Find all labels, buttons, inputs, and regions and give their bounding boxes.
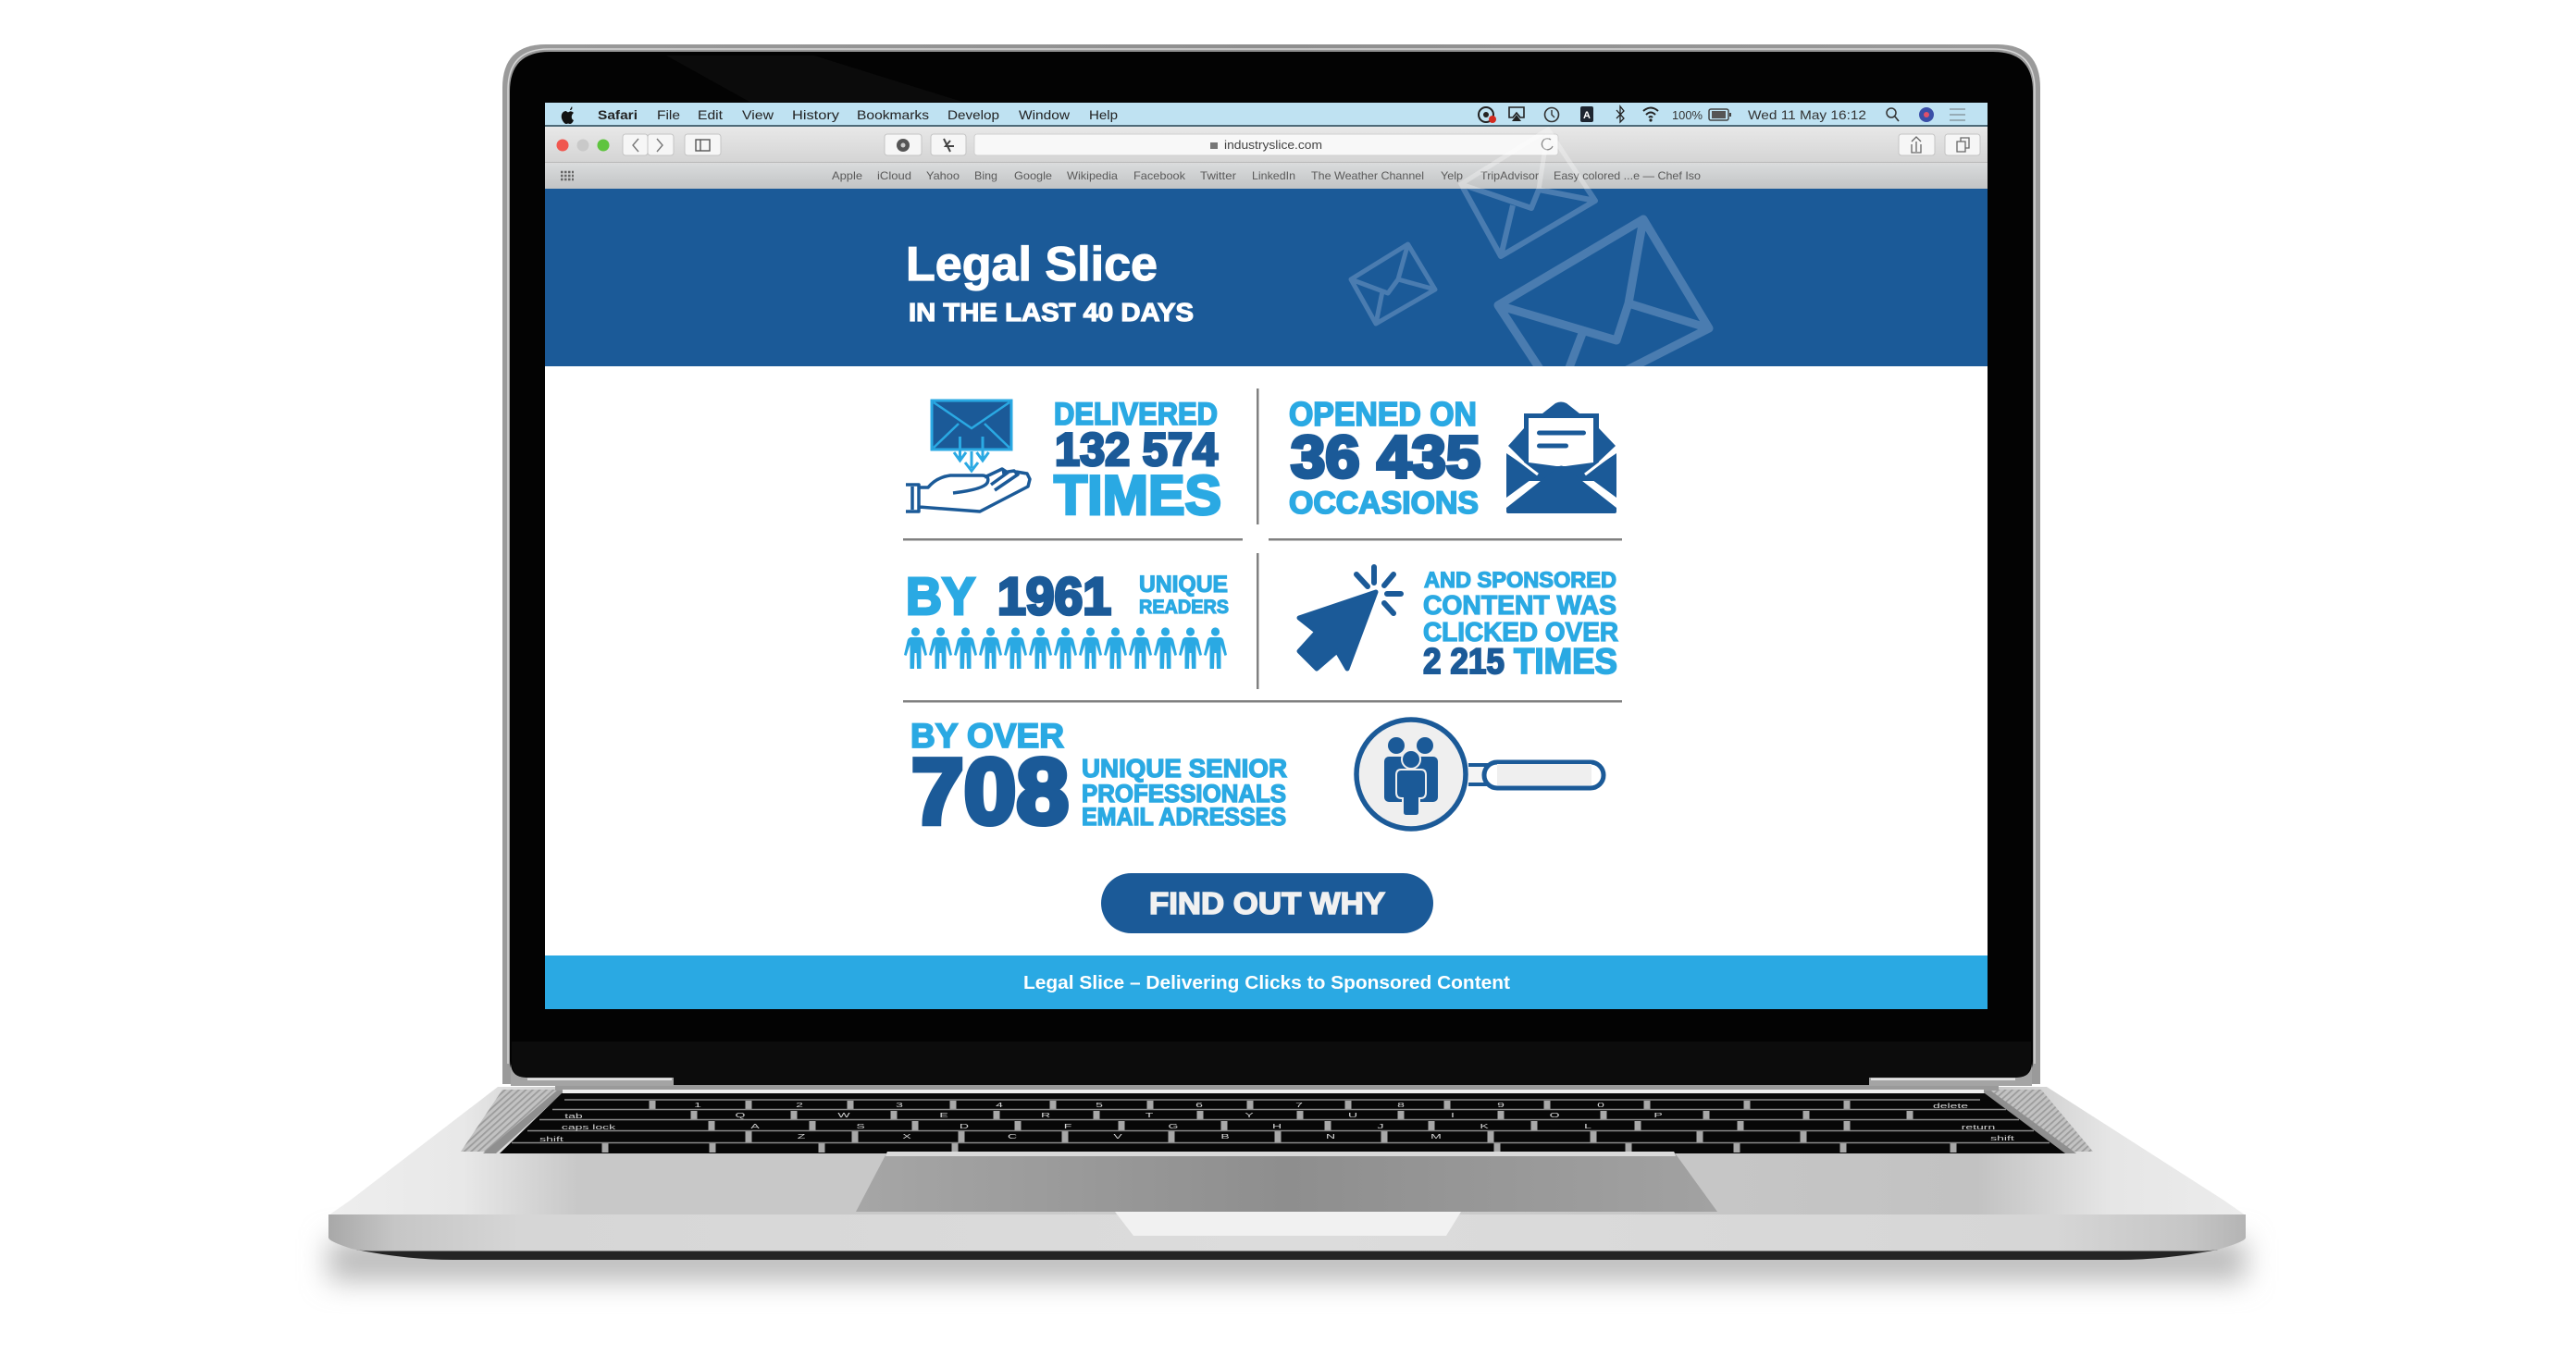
key labels: W — [837, 1112, 850, 1119]
icon: envelope over hand — [906, 401, 1030, 512]
key labels: G — [1169, 1123, 1178, 1130]
key labels: B — [1220, 1133, 1230, 1140]
bookmark links: Bing — [974, 169, 997, 182]
professionals text: EMAIL ADRESSES — [1082, 803, 1286, 831]
trackpad — [856, 1152, 1717, 1212]
menu items: History — [792, 107, 839, 122]
hinge strip — [555, 1084, 1999, 1091]
professionals text: PROFESSIONALS — [1082, 780, 1286, 807]
bookmark links: LinkedIn — [1252, 169, 1295, 182]
icon: top sites grid — [561, 172, 574, 179]
key labels: A — [750, 1123, 760, 1130]
panel: readers — [904, 567, 1229, 669]
faint envelope over toolbar — [1458, 133, 1590, 189]
keyboard channel — [483, 1090, 2076, 1153]
header title: Legal Slice — [906, 238, 1158, 291]
key labels: D — [960, 1123, 969, 1130]
address bar — [974, 134, 1558, 155]
key labels: 6 — [1195, 1102, 1203, 1109]
professionals text — [1082, 754, 1287, 831]
front underside — [356, 1250, 2218, 1260]
bookmark links — [832, 169, 1701, 182]
key labels: L — [1584, 1123, 1591, 1130]
delivered number: 132 574 — [1055, 424, 1218, 475]
key labels: R — [1041, 1112, 1050, 1119]
key labels: F — [1064, 1123, 1072, 1130]
key labels: C — [1008, 1133, 1017, 1140]
bookmark links: Wikipedia — [1067, 169, 1118, 182]
key labels: 8 — [1397, 1102, 1405, 1109]
key labels: shift — [539, 1136, 564, 1143]
key labels: 0 — [1597, 1102, 1604, 1109]
key labels: Z — [798, 1133, 806, 1140]
bookmark links: Apple — [832, 169, 862, 182]
readers number: 1961 — [997, 567, 1111, 626]
menu items: Bookmarks — [857, 107, 929, 122]
key labels: 1 — [694, 1102, 701, 1109]
by label: BY — [906, 567, 975, 626]
header banner — [545, 189, 1988, 366]
bookmark links: Twitter — [1200, 169, 1236, 182]
by over label: BY OVER — [910, 717, 1064, 755]
dividers — [903, 388, 1622, 703]
screen — [545, 103, 1988, 1009]
bookmark links: Yahoo — [926, 169, 960, 182]
key labels: 9 — [1497, 1102, 1505, 1109]
menu items: Safari — [598, 107, 638, 122]
status icons: A — [1583, 110, 1591, 121]
status icons — [1479, 106, 1965, 123]
footer bar — [545, 955, 1988, 1009]
bookmark links: TripAdvisor — [1480, 169, 1539, 182]
opening notch — [1115, 1212, 1461, 1236]
professionals text: UNIQUE SENIOR — [1082, 754, 1287, 783]
key labels: caps lock — [562, 1124, 616, 1131]
footer bar: Legal Slice – Delivering Clicks to Sponsored Content — [1023, 973, 1510, 993]
key labels: Q — [736, 1112, 746, 1119]
keyboard well — [500, 1093, 2065, 1153]
sponsored text: CLICKED OVER — [1423, 618, 1618, 647]
hinges — [511, 1064, 2032, 1086]
times label: TIMES — [1054, 464, 1221, 526]
sponsored text — [1423, 568, 1618, 682]
menu items — [598, 107, 1118, 122]
panel: senior professionals — [910, 717, 1604, 844]
speaker grilles — [461, 1090, 2093, 1152]
bookmark links: The Weather Channel — [1311, 169, 1424, 182]
key labels: 3 — [896, 1102, 903, 1109]
envelope watermarks — [1349, 189, 1714, 366]
key labels: H — [1272, 1123, 1282, 1130]
key labels: shift — [1990, 1135, 2014, 1142]
lid rim — [502, 44, 2040, 1084]
opened number: 36 435 — [1291, 424, 1480, 490]
icon: apple — [562, 106, 574, 124]
professionals number: 708 — [911, 740, 1069, 844]
key labels: Y — [1245, 1112, 1254, 1119]
browser toolbar — [545, 127, 1988, 163]
key labels: V — [1113, 1133, 1122, 1140]
menu items: Edit — [698, 107, 723, 122]
sponsored text: AND SPONSORED — [1424, 568, 1616, 593]
readers label: READERS — [1139, 597, 1229, 618]
button: find out why — [1101, 873, 1433, 933]
key labels: return — [1962, 1124, 1995, 1131]
key labels: N — [1326, 1133, 1335, 1140]
keyboard deck — [328, 1087, 2246, 1215]
bookmark links: Google — [1014, 169, 1052, 182]
people row — [904, 627, 1227, 669]
traffic lights — [557, 139, 609, 152]
key labels: T — [1146, 1112, 1154, 1119]
header subtitle: IN THE LAST 40 DAYS — [909, 298, 1194, 327]
toolbar buttons — [623, 134, 1980, 155]
key labels: I — [1451, 1112, 1455, 1119]
key labels: P — [1653, 1112, 1663, 1119]
address bar: industryslice.com — [1224, 138, 1322, 152]
menu items: File — [657, 107, 680, 122]
key labels: O — [1550, 1112, 1560, 1119]
key labels — [539, 1102, 2014, 1143]
bookmark links: iCloud — [877, 169, 911, 182]
laptop lid and bezel — [502, 44, 2040, 1086]
unique label: UNIQUE — [1139, 572, 1228, 598]
key labels: M — [1430, 1133, 1442, 1140]
key labels: X — [902, 1133, 911, 1140]
key labels: 4 — [996, 1102, 1003, 1109]
key labels: J — [1378, 1123, 1383, 1130]
key labels: delete — [1933, 1103, 1968, 1110]
black bezel — [510, 52, 2033, 1085]
key labels: S — [856, 1123, 865, 1130]
panel: sponsored clicks — [1299, 567, 1618, 682]
sponsored text: CONTENT WAS — [1423, 591, 1616, 621]
menu items: View — [742, 107, 774, 122]
key labels: K — [1480, 1123, 1489, 1130]
menu items: Help — [1089, 107, 1118, 122]
key labels: 7 — [1295, 1102, 1303, 1109]
panel: opened — [1289, 395, 1616, 521]
opened label: OPENED ON — [1289, 395, 1477, 433]
laptop base — [328, 1084, 2246, 1260]
bookmark links: Yelp — [1441, 169, 1463, 182]
panel: delivered — [906, 397, 1221, 526]
sponsored text: TIMES — [1514, 642, 1617, 682]
front edge — [328, 1214, 2246, 1251]
icon: magnifier with people — [1356, 720, 1604, 829]
delivered label: DELIVERED — [1054, 397, 1218, 432]
key labels: 5 — [1096, 1102, 1103, 1109]
status icons: 100% — [1672, 108, 1703, 122]
status icons: Wed 11 May 16:12 — [1748, 107, 1866, 122]
bookmark links: Easy colored ...e — Chef Iso — [1554, 169, 1701, 182]
menu items: Develop — [947, 107, 999, 122]
key labels: E — [939, 1112, 948, 1119]
menu items: Window — [1019, 107, 1071, 122]
sponsored text: 2 215 — [1423, 642, 1505, 682]
bookmarks bar — [545, 133, 1988, 189]
laptop shadow — [328, 1239, 2246, 1281]
button: find out why: FIND OUT WHY — [1149, 886, 1385, 920]
key gaps — [605, 1101, 1953, 1153]
icon: open envelope — [1506, 401, 1616, 513]
icon: cursor click — [1299, 567, 1401, 669]
key labels: tab — [564, 1113, 583, 1120]
bookmark links: Facebook — [1133, 169, 1186, 182]
occasions label: OCCASIONS — [1289, 486, 1479, 521]
key labels: 2 — [796, 1102, 803, 1109]
key labels: U — [1348, 1112, 1357, 1119]
macOS menu bar — [545, 103, 1988, 127]
